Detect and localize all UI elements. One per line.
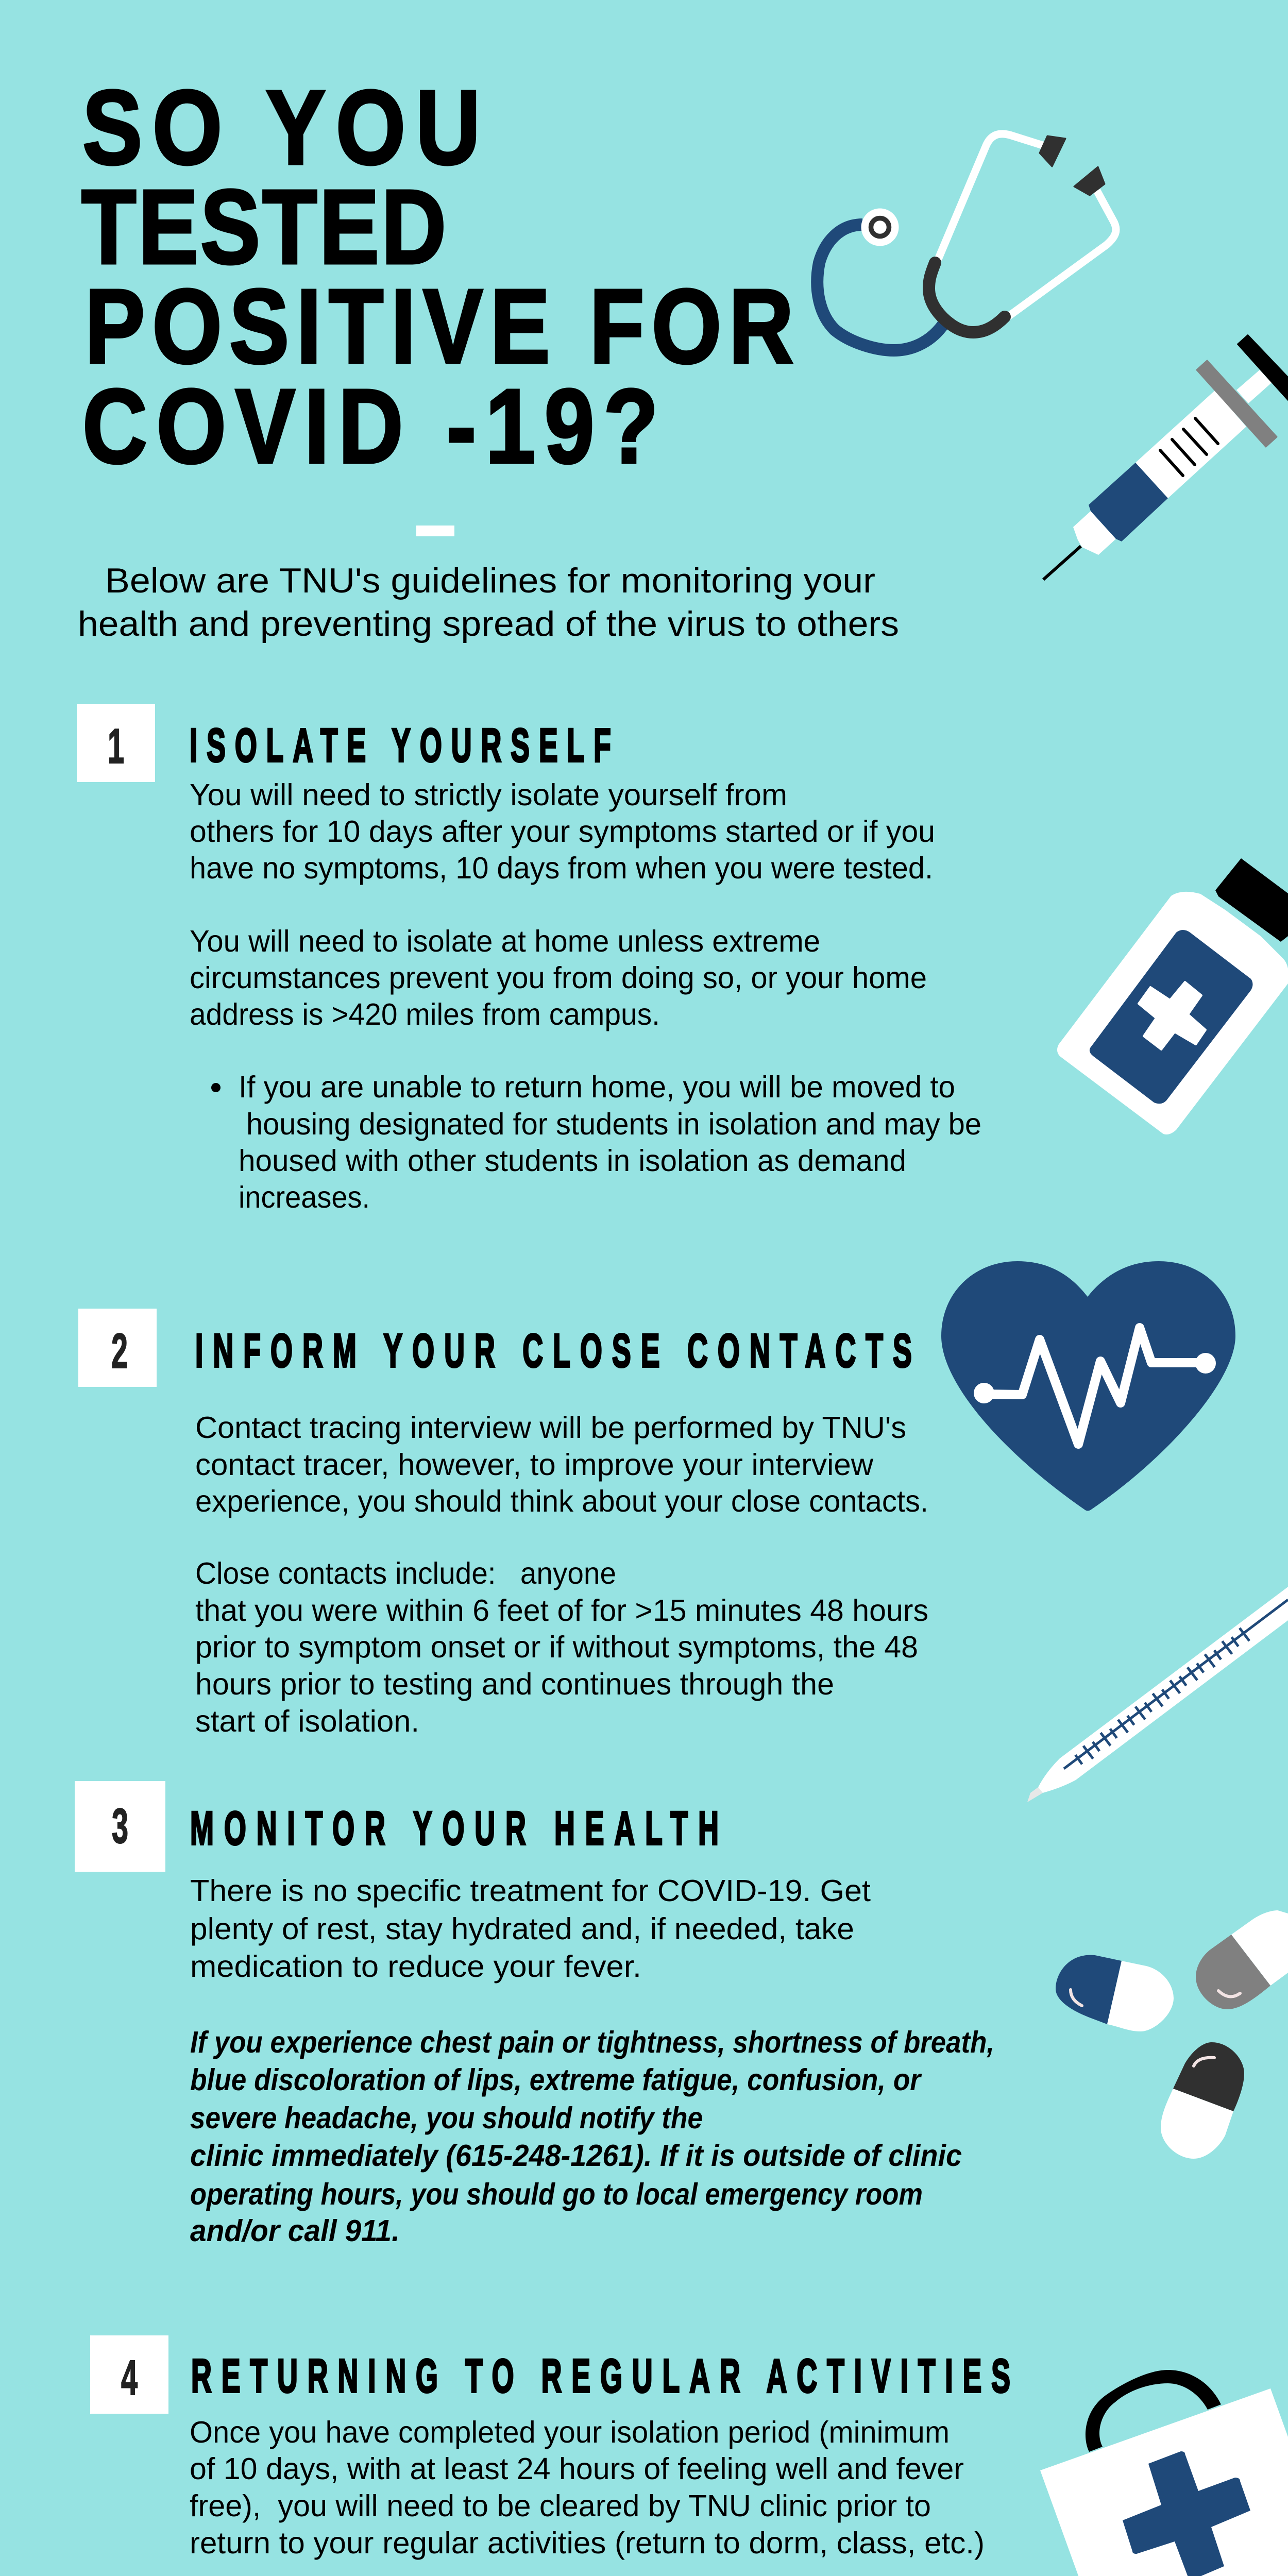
body text 3: plenty of rest, stay hydrated and, if needed, take [190,1912,854,1946]
body text 4: of 10 days, with at least 24 hours of feeling well and fever [190,2452,964,2486]
number box 2 [78,1309,157,1387]
body text 3: There is no specific treatment for COVID-19. Get [190,1874,871,1908]
body text 2: hours prior to testing and continues through the [195,1667,834,1701]
panel: section 4 returning to regular activities [90,2335,1010,2576]
warning text: operating hours, you should go to local emergency room [190,2177,923,2211]
body text 4: Once you have completed your isolation period (minimum [190,2415,950,2449]
number box 2: 2 [111,1323,128,1379]
icon: medicine bottle [1057,858,1288,1134]
panel: section 3 monitor your health [75,1781,994,2248]
heading 4: RETURNING TO REGULAR ACTIVITIES [191,2350,1010,2403]
body text 2: that you were within 6 feet of for >15 minutes 48 hours [195,1594,928,1628]
heading 3: MONITOR YOUR HEALTH [190,1802,719,1855]
warning text: and/or call 911. [190,2214,400,2248]
body text 1: address is >420 miles from campus. [190,997,660,1031]
bullet point: increases. [239,1180,370,1214]
body text 2 [195,1411,928,1738]
heading 2: INFORM YOUR CLOSE CONTACTS [195,1325,912,1378]
warning text: If you experience chest pain or tightness, shortness of breath, [190,2025,994,2059]
number box 1: 1 [108,718,124,774]
bullet point: housed with other students in isolation as demand [239,1144,906,1178]
intro text: Below are TNU's guidelines for monitoring your [105,561,875,600]
warning text [190,2025,994,2248]
intro text [78,561,899,643]
body text 2: Close contacts include: anyone [195,1556,616,1590]
body text 1: circumstances prevent you from doing so, or your home [190,961,927,995]
body text 1: have no symptoms, 10 days from when you were tested. [190,851,933,885]
body text 4: return to your regular activities (return to dorm, class, etc.) [190,2526,985,2560]
warning text: clinic immediately (615-248-1261). If it is outside of clinic [190,2139,962,2173]
warning text: blue discoloration of lips, extreme fatigue, confusion, or [190,2063,922,2097]
intro text: health and preventing spread of the virus to others [78,604,899,643]
body text 1: You will need to strictly isolate yourself from [190,778,787,812]
number box 3: 3 [112,1798,128,1854]
bullet point: housing designated for students in isolation and may be [246,1107,981,1141]
number box 4 [90,2335,168,2414]
warning text: severe headache, you should notify the [190,2101,703,2135]
icon: heart with pulse [941,1261,1235,1511]
body text 2: experience, you should think about your close contacts. [195,1484,928,1518]
body text 1: You will need to isolate at home unless extreme [190,924,820,958]
title: SO YOU [82,69,481,187]
title [81,69,793,485]
body text 2: Contact tracing interview will be performed by TNU's [195,1411,906,1445]
icon: pills [1056,1910,1288,2159]
heading 1: ISOLATE YOURSELF [190,719,611,772]
body text 1: others for 10 days after your symptoms started or if you [190,815,935,849]
title: COVID -19? [82,368,658,485]
body text 3 [190,1874,871,1984]
number box 4: 4 [121,2350,138,2405]
icon: first aid bag [1040,2370,1288,2576]
bullet point [211,1070,981,1214]
body text 2: prior to symptom onset or if without symptoms, the 48 [195,1630,918,1664]
title: POSITIVE FOR [85,268,793,385]
icon: syringe [1043,335,1288,580]
body text 4: free), you will need to be cleared by TNU clinic prior to [190,2489,931,2523]
panel: section 2 inform your close contacts [78,1309,928,1738]
icon: thermometer [1027,1587,1288,1802]
number box 1 [77,704,155,782]
body text 4 [190,2415,985,2576]
body text 1 [190,778,935,1031]
bullet point: If you are unable to return home, you will be moved to [239,1070,955,1104]
number box 3 [75,1781,165,1872]
body text 2: start of isolation. [195,1704,419,1738]
icon: stethoscope [817,134,1116,350]
title: TESTED [81,168,446,286]
body text 3: medication to reduce your fever. [190,1950,641,1984]
white dash [416,526,454,536]
panel: section 1 isolate yourself [77,704,981,1214]
body text 2: contact tracer, however, to improve your interview [195,1448,873,1482]
